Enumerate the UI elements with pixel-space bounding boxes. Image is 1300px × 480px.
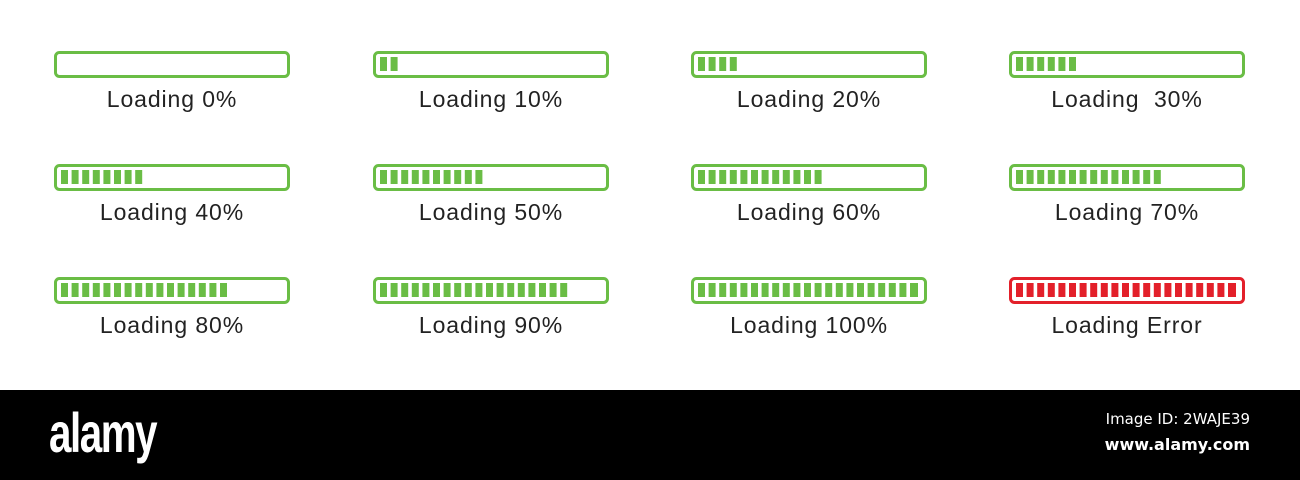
panel: loading error: [1009, 277, 1245, 338]
panel: loading 10%: Loading 10%: [419, 86, 563, 112]
panel: loading 80%: Loading 80%: [100, 312, 244, 338]
panel: loading error: Loading Error: [1051, 312, 1203, 338]
panel: loading 40%: [54, 164, 290, 225]
panel: loading 30%: Loading 30%: [1051, 86, 1203, 112]
panel: loading 90%: [373, 277, 609, 338]
panel: loading 10%: [373, 51, 609, 112]
logo: alamy: alamy: [49, 401, 156, 464]
website: www.alamy.com: [1105, 435, 1250, 454]
panel: loading 80%: [54, 277, 290, 338]
panel: loading 70%: Loading 70%: [1055, 199, 1199, 225]
panel: loading 50%: Loading 50%: [419, 199, 563, 225]
panel: loading 0%: Loading 0%: [107, 86, 237, 112]
panel: loading 40%: Loading 40%: [100, 199, 244, 225]
image id: Image ID: 2WAJE39: [1106, 410, 1250, 428]
panel: loading 50%: [373, 164, 609, 225]
panel: loading 100%: Loading 100%: [730, 312, 888, 338]
panel: loading 30%: [1009, 51, 1245, 112]
panel: loading 70%: [1009, 164, 1245, 225]
panel: loading 20%: [691, 51, 927, 112]
panel: loading 0%: [54, 51, 290, 112]
footer: [0, 390, 1300, 480]
panel: loading 90%: Loading 90%: [419, 312, 563, 338]
panel: loading 100%: [691, 277, 927, 338]
panel: loading 60%: Loading 60%: [737, 199, 881, 225]
panel: loading 20%: Loading 20%: [737, 86, 881, 112]
panel: loading 60%: [691, 164, 927, 225]
